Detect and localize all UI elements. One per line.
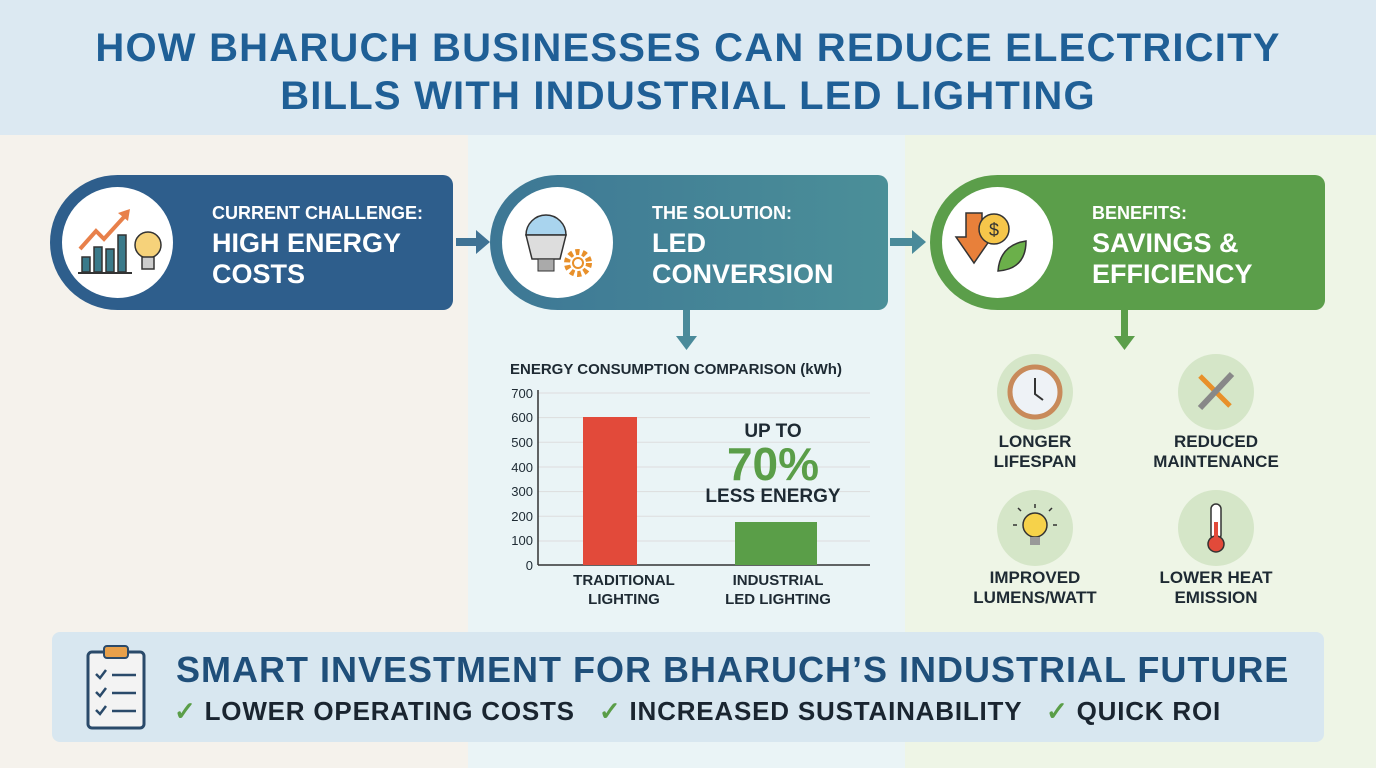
chart: energy consumption comparison: 400 xyxy=(511,460,533,475)
benefit: improved lumens: IMPROVED xyxy=(990,568,1080,587)
heading: smart investment: SMART INVESTMENT FOR BHARUCH’S INDUSTRIAL FUTURE xyxy=(176,649,1289,690)
bottom banner xyxy=(52,632,1324,742)
text: solution: THE SOLUTION: xyxy=(652,203,792,223)
text: benefits: BENEFITS: xyxy=(1092,203,1187,223)
panel: benefits xyxy=(930,175,1325,310)
background columns xyxy=(468,0,905,768)
chart: energy consumption comparison: ENERGY CONSUMPTION COMPARISON (kWh) xyxy=(510,361,842,378)
benefit: improved lumens: LUMENS/WATT xyxy=(973,588,1097,607)
benefit: reduced maintenance: REDUCED xyxy=(1174,432,1258,451)
chart: energy consumption comparison: 600 xyxy=(511,410,533,425)
chart: energy consumption comparison: 0 xyxy=(526,558,533,573)
benefit: reduced maintenance xyxy=(1153,354,1279,471)
text: challenge: CURRENT CHALLENGE: xyxy=(212,203,423,223)
text: benefits: SAVINGS & xyxy=(1092,228,1239,258)
benefit: longer lifespan xyxy=(994,354,1076,471)
arrow xyxy=(456,230,490,254)
text: challenge: HIGH ENERGY xyxy=(212,228,401,258)
benefit: lower heat: LOWER HEAT xyxy=(1159,568,1272,587)
chart: energy consumption comparison: INDUSTRIAL xyxy=(733,572,823,589)
chart: energy consumption comparison: 300 xyxy=(511,484,533,499)
icon: savings xyxy=(942,187,1053,298)
chart: energy consumption comparison: 700 xyxy=(511,386,533,401)
benefit: reduced maintenance: MAINTENANCE xyxy=(1153,452,1279,471)
arrow down benefits xyxy=(1114,310,1135,350)
icon: savings: $ xyxy=(989,220,999,240)
icon: rising chart and bulb xyxy=(62,187,173,298)
chart: energy consumption comparison: UP TO xyxy=(744,421,802,442)
chart: energy consumption comparison: LED LIGHTING xyxy=(725,591,831,608)
checklist: ✓ LOWER OPERATING COSTS ✓ INCREASED SUSTAINABILITY ✓ QUICK ROI xyxy=(174,696,1221,726)
text: benefits xyxy=(1092,203,1253,289)
title: HOW BHARUCH BUSINESSES CAN REDUCE ELECTRICITY xyxy=(95,26,1281,70)
text: challenge xyxy=(212,203,423,289)
chart: energy consumption comparison: LESS ENERGY xyxy=(705,486,841,507)
panel: solution xyxy=(490,175,888,310)
text: solution: LED xyxy=(652,228,706,258)
text: benefits: EFFICIENCY xyxy=(1092,259,1253,289)
chart: energy consumption comparison: 200 xyxy=(511,509,533,524)
chart: energy consumption comparison: LIGHTING xyxy=(588,591,660,608)
benefit: longer lifespan: LIFESPAN xyxy=(994,452,1076,471)
benefit: improved lumens xyxy=(973,490,1097,607)
icon: clipboard xyxy=(86,645,146,730)
title: BILLS WITH INDUSTRIAL LED LIGHTING xyxy=(280,74,1096,118)
arrow xyxy=(890,230,926,254)
icon: LED bulb and gear xyxy=(502,187,613,298)
title xyxy=(0,0,1376,135)
chart: energy consumption comparison: 500 xyxy=(511,435,533,450)
text: solution: CONVERSION xyxy=(652,259,834,289)
panel: current challenge xyxy=(50,175,453,310)
text: solution xyxy=(652,203,834,289)
benefit: longer lifespan: LONGER xyxy=(999,432,1071,451)
benefit: lower heat xyxy=(1159,490,1272,607)
chart: energy consumption comparison: TRADITIONAL xyxy=(573,572,675,589)
chart: energy consumption comparison: 70% xyxy=(727,438,819,490)
arrow down solution xyxy=(676,310,697,350)
chart: energy consumption comparison: 100 xyxy=(511,533,533,548)
text: challenge: COSTS xyxy=(212,259,305,289)
benefit: lower heat: EMISSION xyxy=(1174,588,1258,607)
chart: energy consumption comparison xyxy=(510,361,870,608)
